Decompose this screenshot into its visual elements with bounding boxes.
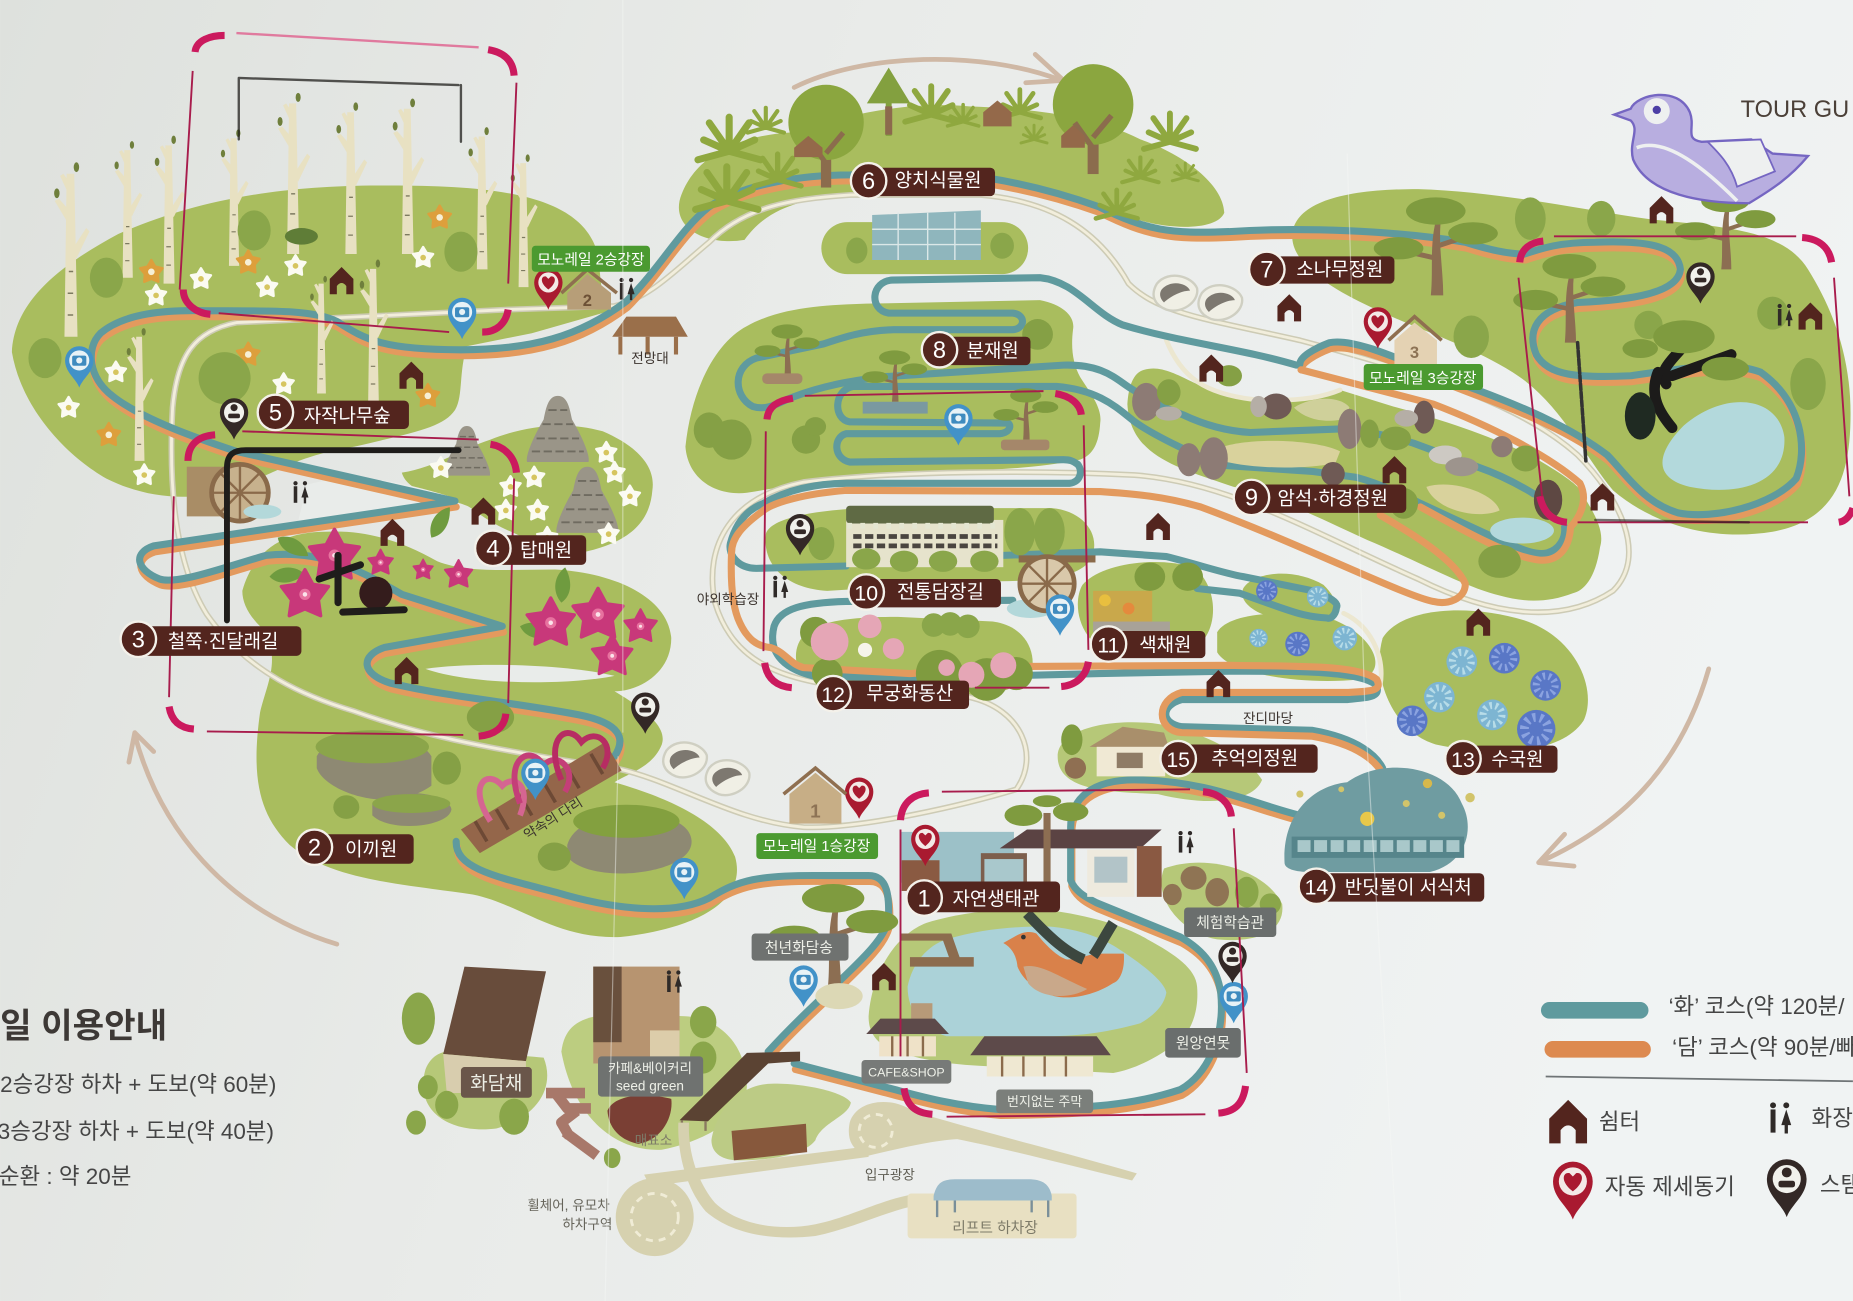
label 7: 소나무정원 — [1296, 258, 1383, 280]
usage guide text — [0, 1072, 276, 1189]
label 5: 5 — [269, 401, 282, 427]
nature ecology hall — [901, 795, 1162, 897]
mugunghwa flowers — [800, 612, 1033, 701]
grey facility labels: 원앙연못 — [1176, 1035, 1230, 1052]
label 9: 9 — [1245, 486, 1258, 512]
legend: shelter — [1549, 1100, 1640, 1143]
grey facility labels: 화담채 — [470, 1072, 522, 1094]
garden ground areas — [12, 105, 1851, 937]
cafe buildings — [402, 884, 898, 1168]
usage guide heading: 일 이용안내 — [0, 1007, 167, 1045]
label 4: 탑매원 — [520, 540, 572, 562]
label 4 — [475, 531, 586, 566]
label 15: 15 — [1166, 748, 1190, 772]
label 10 — [849, 574, 1001, 610]
stone wall — [808, 506, 1065, 572]
birch grove flowers and bushes — [28, 206, 477, 484]
jars and bushes at experience hall — [1163, 866, 1281, 915]
label 13: 13 — [1451, 748, 1475, 772]
label 14: 14 — [1305, 876, 1328, 900]
place name texts: 약속의 다리 — [521, 795, 585, 843]
monorail station labels: 모노레일 3승강장 — [1369, 370, 1477, 387]
legend: stamp — [1767, 1159, 1853, 1217]
hydrangeas — [1249, 580, 1561, 748]
legend: shelter: 쉼터 — [1599, 1110, 1640, 1135]
tour guide title: TOUR GU — [1741, 97, 1849, 123]
birch trees — [54, 93, 538, 461]
label 2 — [297, 830, 414, 865]
walking routes — [91, 172, 1803, 1115]
place name texts: 잔디마당 — [1243, 711, 1293, 726]
grey facility labels: 천년화담송 — [765, 939, 833, 956]
label 14 — [1299, 869, 1484, 904]
legend — [1541, 994, 1853, 1219]
stone towers and plum flowers — [431, 396, 640, 547]
place name texts: 휠체어, 유모차 — [527, 1198, 610, 1213]
grey facility labels: 번지없는 주막 — [1007, 1094, 1082, 1109]
entrance road — [616, 1102, 1137, 1256]
grey facility labels — [461, 908, 1276, 1113]
label 1 — [906, 880, 1060, 916]
purple duck stamp — [1614, 95, 1808, 203]
legend: defibrillator — [1553, 1162, 1735, 1219]
pine pond — [1662, 402, 1784, 490]
label 11 — [1091, 626, 1205, 662]
black marker overprint — [227, 78, 1749, 620]
label 1: 1 — [918, 886, 931, 912]
legend: dam course: ‘담’ 코스(약 90분/빠 — [1672, 1035, 1853, 1060]
bonsai — [694, 319, 1058, 460]
label 11: 색채원 — [1139, 634, 1191, 656]
label 15: 추억의정원 — [1211, 748, 1298, 770]
restroom icons — [293, 278, 1793, 993]
label 3: 3 — [132, 628, 145, 654]
white lawn shapes — [295, 478, 615, 682]
hanok pavilions — [866, 934, 1111, 1076]
paper fold lines — [605, 0, 1400, 1301]
pine garden — [1374, 190, 1826, 410]
legend: restroom — [1770, 1102, 1853, 1133]
label 13: 수국원 — [1491, 749, 1543, 771]
place name texts: 리프트 하차장 — [952, 1219, 1038, 1236]
usage guide text: 순환 : 약 20분 — [0, 1164, 131, 1189]
monorail stations: 3 — [1410, 343, 1419, 362]
crimson zone frames — [169, 33, 1853, 1117]
watermill — [187, 464, 281, 521]
label 6 — [851, 163, 995, 199]
label 2: 2 — [308, 836, 321, 862]
label 7: 7 — [1260, 258, 1273, 284]
teal: bonsai serpentine to rock garden — [738, 278, 1534, 494]
legend: hwa course — [1541, 994, 1845, 1019]
label 6: 양치식물원 — [895, 170, 982, 192]
lift station — [908, 1179, 1077, 1238]
label 6: 6 — [862, 169, 875, 195]
label 8 — [922, 332, 1030, 367]
usage guide text: 2승강장 하차 + 도보(약 60분) — [0, 1072, 276, 1097]
shelter icons — [330, 196, 1822, 990]
teal: hydrangea branch — [1003, 552, 1337, 618]
label 10: 10 — [854, 581, 878, 605]
label 12 — [815, 676, 969, 711]
azaleas — [270, 503, 657, 674]
memory garden house — [1061, 724, 1170, 779]
monorail cars — [663, 276, 1242, 795]
legend: dam course — [1545, 1035, 1853, 1060]
label 3 — [121, 622, 301, 657]
moss stone walls — [316, 701, 692, 873]
numbered garden labels — [121, 163, 1558, 916]
grey facility labels: CAFE&SHOP — [868, 1065, 945, 1079]
label 1: 자연생태관 — [952, 888, 1039, 910]
firefly habitat — [1284, 768, 1475, 872]
label 5: 자작나무숲 — [304, 405, 391, 427]
label 2: 이끼원 — [345, 839, 397, 861]
legend: hwa course: ‘화’ 코스(약 120분/ — [1669, 994, 1845, 1019]
label 3: 철쭉·진달래길 — [168, 631, 278, 653]
monorail station labels — [532, 246, 1483, 859]
colour garden bed — [1093, 562, 1203, 632]
label 12: 무궁화동산 — [866, 683, 953, 705]
label 5 — [258, 395, 409, 430]
grey facility labels: 카페&베이커리 — [608, 1061, 692, 1076]
teal: central switchbacks — [730, 386, 1565, 568]
grey facility labels: 체험학습관 — [1196, 915, 1265, 932]
place name texts: 매표소 — [635, 1133, 672, 1148]
pond — [908, 926, 1166, 1036]
orange: rock garden outer — [1301, 370, 1583, 560]
label 14: 반딧불이 서식처 — [1345, 876, 1472, 898]
label 9 — [1234, 480, 1406, 515]
promise bridge — [461, 733, 622, 853]
monorail station labels: 모노레일 2승강장 — [537, 252, 645, 269]
legend: defibrillator: 자동 제세동기 — [1605, 1175, 1735, 1200]
rock garden — [1132, 365, 1562, 578]
label 13 — [1445, 741, 1558, 776]
greenhouse — [846, 210, 1014, 264]
usage guide text: 3승강장 하차 + 도보(약 40분) — [0, 1119, 274, 1144]
monorail stations: 2 — [583, 291, 592, 310]
label 10: 전통담장길 — [897, 581, 984, 603]
label 8: 8 — [933, 338, 946, 364]
monorail stations: 1 — [810, 802, 821, 823]
label 12: 12 — [821, 683, 845, 707]
observation deck — [612, 317, 688, 354]
place name texts: 하차구역 — [562, 1217, 612, 1232]
second watermill — [1007, 555, 1095, 618]
place name texts: 입구광장 — [865, 1167, 915, 1182]
label 8: 분재원 — [967, 340, 1019, 362]
place name texts — [521, 351, 1293, 1236]
location pins — [65, 262, 1715, 1023]
grey facility labels: seed green — [616, 1079, 684, 1094]
label 4: 4 — [486, 537, 499, 563]
teal: lower central loop — [773, 600, 1383, 768]
orange: central long run — [731, 490, 1465, 774]
label 15 — [1160, 741, 1318, 776]
monorail track — [171, 195, 1629, 827]
legend: restroom: 화장 — [1812, 1106, 1853, 1131]
top ferns and trees — [696, 64, 1198, 218]
monorail station labels: 모노레일 1승강장 — [763, 838, 871, 855]
place name texts: 전망대 — [631, 351, 669, 366]
label 7 — [1249, 252, 1394, 287]
place name texts: 야외학습장 — [697, 592, 760, 607]
label 9: 암석·하경정원 — [1277, 488, 1388, 510]
mandarin duck — [1003, 913, 1124, 997]
label 11: 11 — [1097, 633, 1120, 657]
black pine overprint — [1578, 320, 1749, 461]
monorail stations — [561, 269, 1442, 824]
flight direction arrows — [129, 54, 1709, 944]
